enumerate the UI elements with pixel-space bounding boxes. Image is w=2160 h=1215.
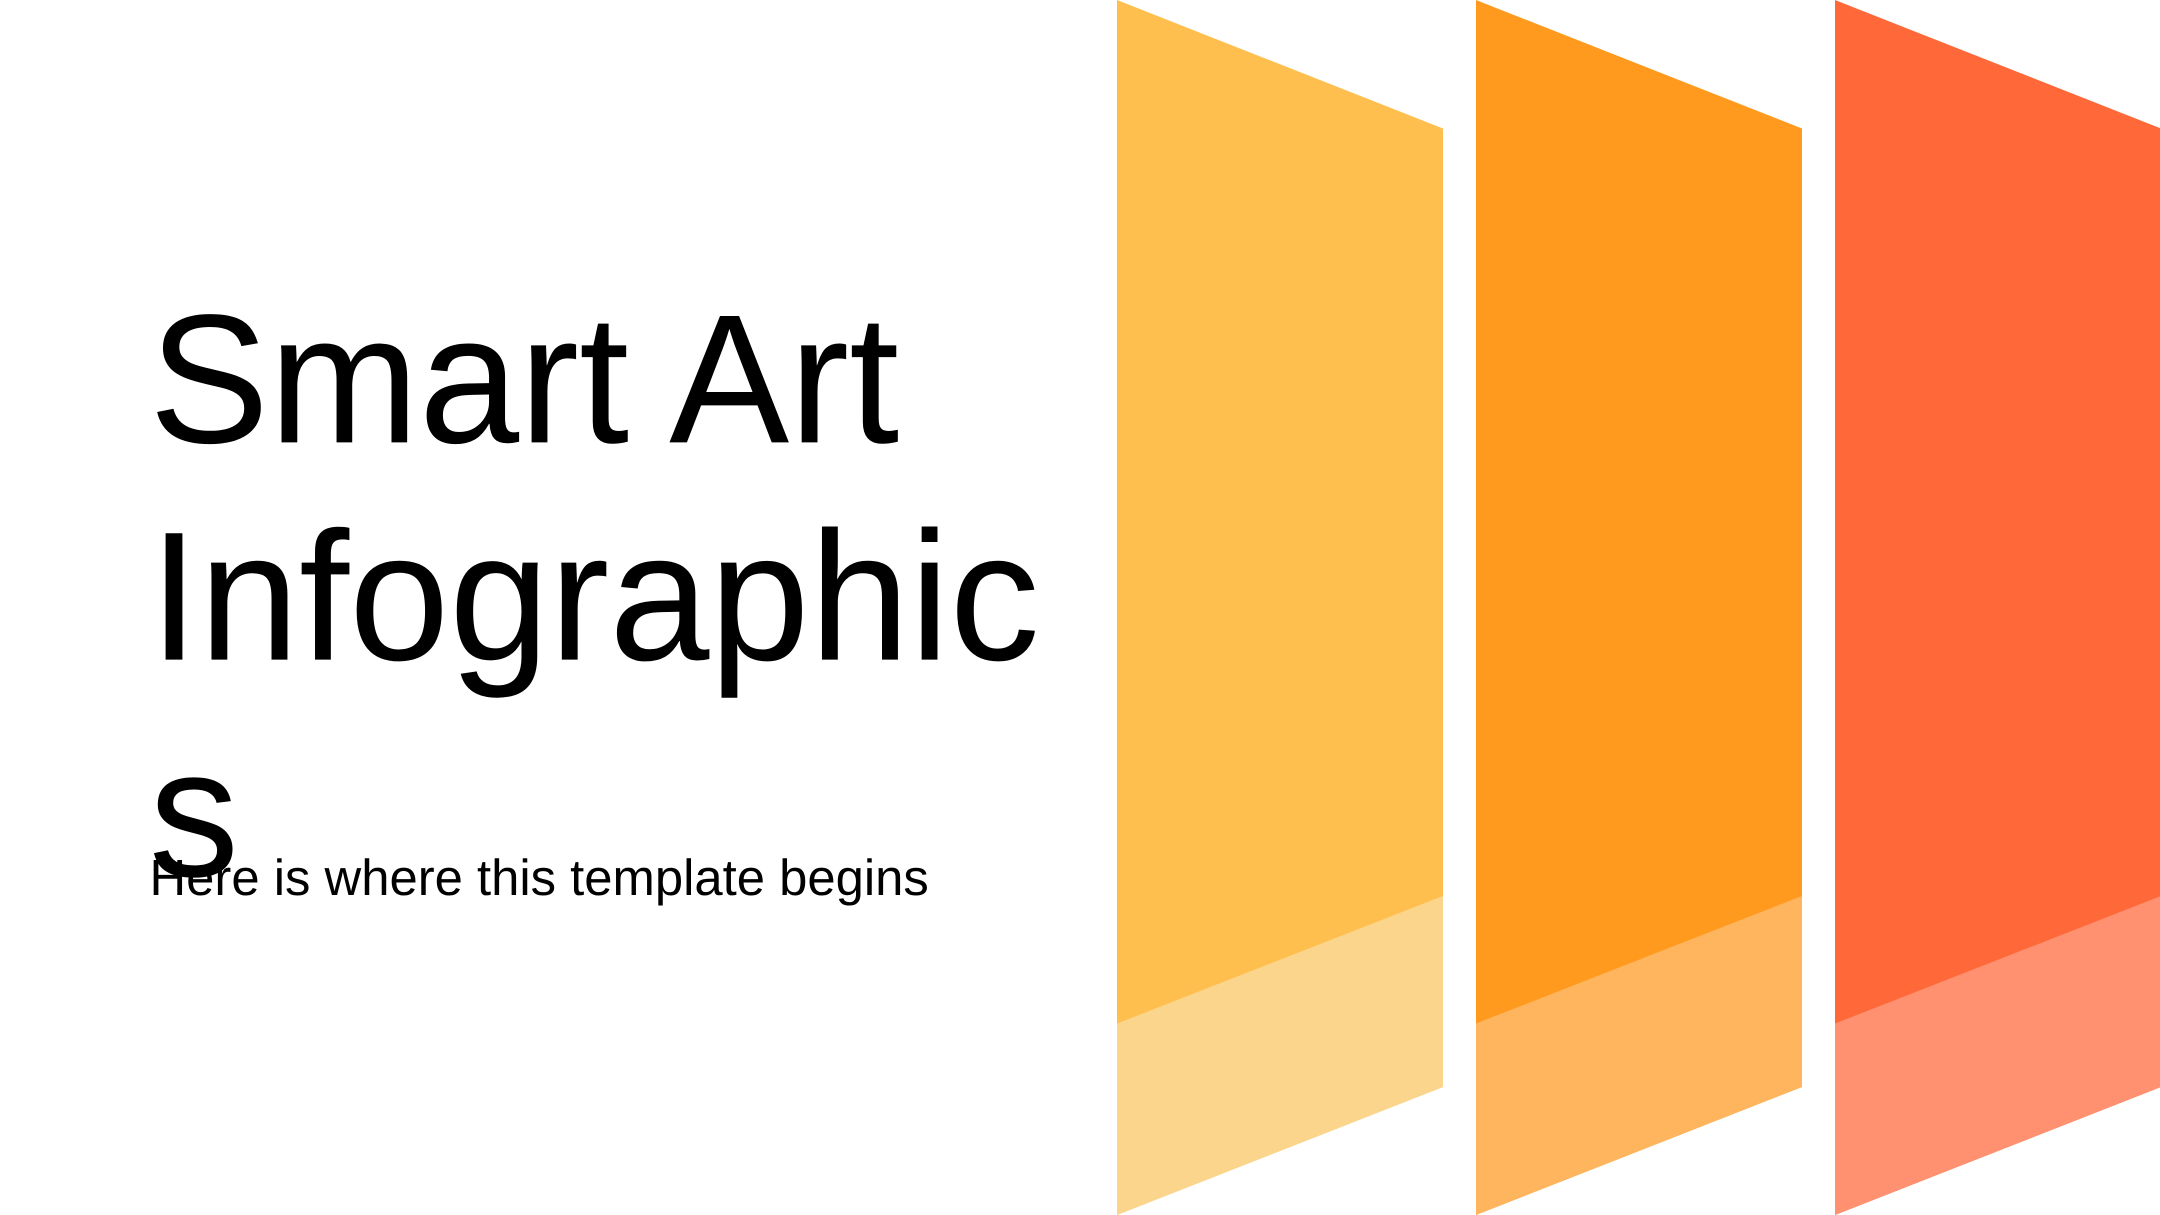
title: Smart Art bbox=[149, 277, 899, 482]
panel: red bbox=[1835, 0, 2160, 1215]
title: Infographic bbox=[149, 494, 1040, 699]
title bbox=[149, 277, 1040, 916]
subtitle: Here is where this template begins bbox=[150, 849, 929, 906]
panel: orange bbox=[1476, 0, 1802, 1215]
panel: yellow bbox=[1117, 0, 1443, 1215]
title: s bbox=[149, 711, 239, 916]
